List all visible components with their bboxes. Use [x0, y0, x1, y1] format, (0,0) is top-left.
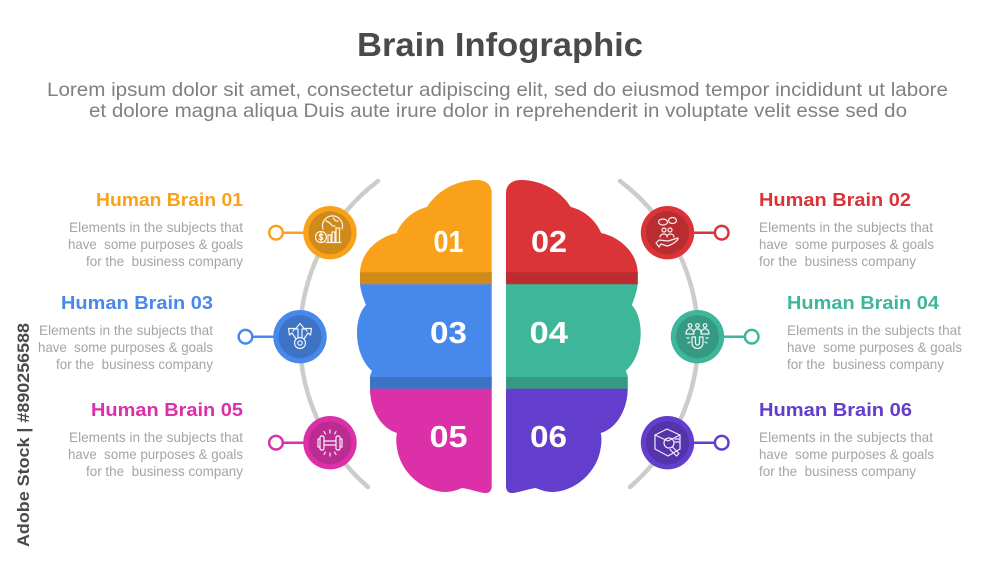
text block: Human Brain 06: for the business company [759, 463, 916, 479]
text block: Human Brain 01: Elements in the subjects that [69, 219, 243, 235]
title: Brain Infographic [357, 26, 643, 63]
text block: Human Brain 01: for the business company [86, 253, 243, 269]
subtitle text: et dolore magna aliqua Duis aute irure dolor in reprehenderit in voluptate velit esse sed do [89, 100, 907, 122]
brain segment 04: 04 [530, 315, 569, 350]
node 01 with connector [269, 206, 357, 259]
brain segment 05: 05 [430, 419, 468, 454]
text block: Human Brain 04: Human Brain 04 [787, 293, 939, 313]
subtitle text [47, 79, 948, 122]
text block: Human Brain 06: have some purposes & goals [759, 446, 934, 462]
subtitle text: Lorem ipsum dolor sit amet, consectetur adipiscing elit, sed do eiusmod tempor incididunt ut labore [47, 79, 948, 101]
text block: Human Brain 04: have some purposes & goals [787, 339, 962, 355]
right grey arc [620, 181, 698, 487]
text block: Human Brain 05 [68, 400, 243, 479]
text block: Human Brain 03: for the business company [56, 356, 213, 372]
text block: Human Brain 05: Human Brain 05 [91, 400, 243, 420]
brain graphic [357, 180, 641, 493]
text block: Human Brain 06: Elements in the subjects that [759, 429, 933, 445]
text block: Human Brain 02: Elements in the subjects that [759, 219, 933, 235]
text block: Human Brain 02: have some purposes & goals [759, 236, 934, 252]
text block: Human Brain 02 [759, 190, 934, 269]
brain segment 02: 02 [531, 224, 567, 259]
text block: Human Brain 05: have some purposes & goals [68, 446, 243, 462]
brain segment 01 [360, 180, 492, 284]
text block: Human Brain 05: Elements in the subjects that [69, 429, 243, 445]
text block: Human Brain 05: for the business company [86, 463, 243, 479]
text block: Human Brain 01: have some purposes & goals [68, 236, 243, 252]
stock credit label: Adobe Stock | #890256588 [14, 323, 33, 547]
icon: magnet attracting people [686, 324, 709, 349]
node 04 with connector [671, 310, 758, 363]
brain segment 03 [357, 284, 492, 389]
text block: Human Brain 03: Human Brain 03 [61, 293, 213, 313]
text block: Human Brain 01 [68, 190, 243, 269]
icon: dumbbell [318, 430, 342, 456]
text block: Human Brain 04 [787, 293, 962, 372]
icon: hand holding people and speech bubbles [656, 218, 678, 247]
node 03 with connector [239, 310, 327, 363]
icon: box with magnifier [655, 429, 680, 456]
text block: Human Brain 02: for the business company [759, 253, 916, 269]
left grey arc [300, 181, 378, 487]
brain segment 02 [506, 180, 638, 284]
brain segment 04 [506, 284, 641, 389]
text block: Human Brain 03: Elements in the subjects that [39, 322, 213, 338]
brain segment 05 [370, 389, 492, 493]
text block: Human Brain 01: Human Brain 01 [96, 190, 243, 210]
brain segment 06: 06 [530, 419, 567, 454]
icon: three diverging arrows [288, 324, 312, 348]
node 05 with connector [269, 416, 357, 469]
text block: Human Brain 04: Elements in the subjects that [787, 322, 961, 338]
node 06 with connector [641, 416, 728, 469]
node 02 with connector [641, 206, 728, 259]
brain segment 01: 01 [434, 224, 464, 259]
text block: Human Brain 06: Human Brain 06 [759, 400, 912, 420]
text block: Human Brain 03 [38, 293, 213, 372]
text block: Human Brain 04: for the business company [787, 356, 944, 372]
brain segment 06 [506, 389, 628, 493]
text block: Human Brain 02: Human Brain 02 [759, 190, 911, 210]
text block: Human Brain 06 [759, 400, 934, 479]
icon: globe, coin and bars [316, 216, 342, 242]
text block: Human Brain 03: have some purposes & goals [38, 339, 213, 355]
brain segment 03: 03 [430, 315, 467, 350]
